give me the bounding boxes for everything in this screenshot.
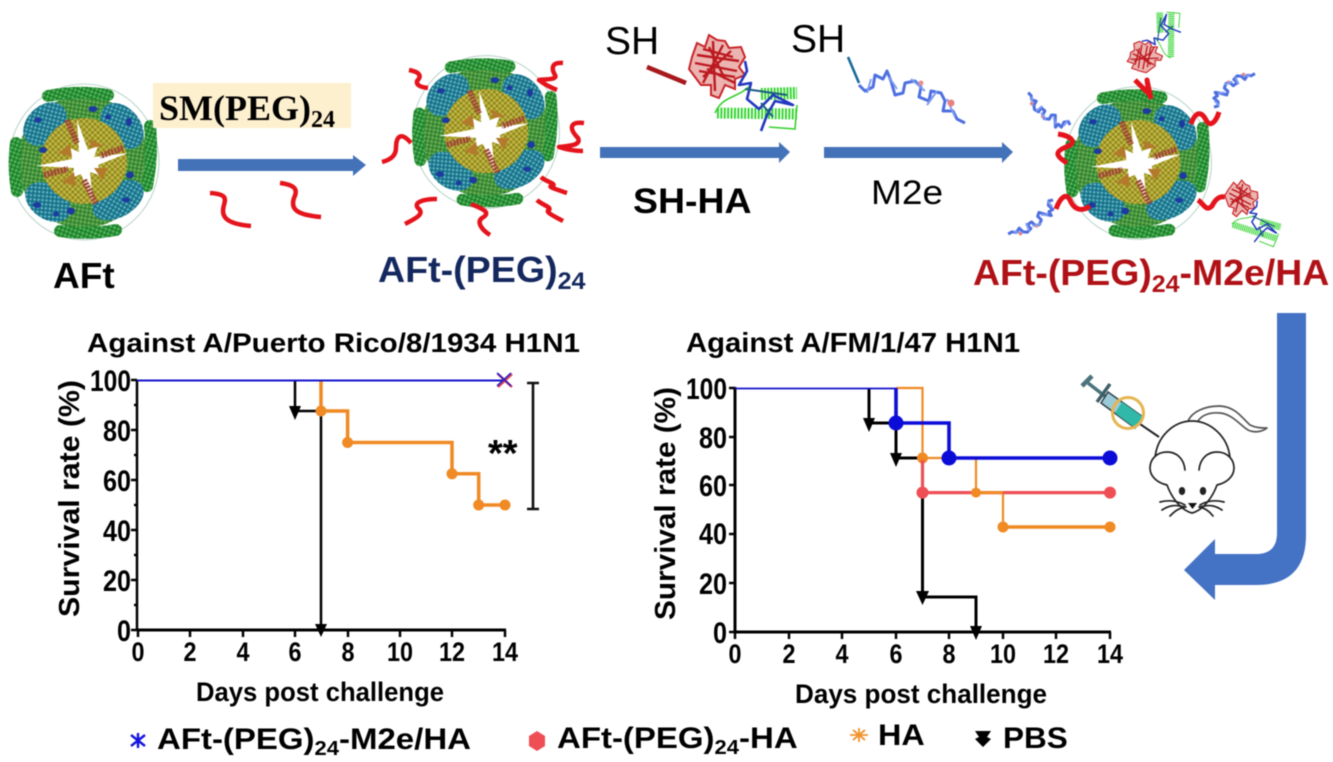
x axis: 12 xyxy=(1043,639,1069,669)
M2e linker xyxy=(848,57,859,83)
y axis: 40 xyxy=(103,515,131,548)
y axis: 20 xyxy=(103,565,131,598)
series: PBS xyxy=(863,388,982,640)
legend xyxy=(131,718,1068,760)
x axis: 12 xyxy=(439,637,465,667)
SH-HA linker xyxy=(647,67,686,83)
series: AFt-(PEG)24-M2e/HA xyxy=(735,388,1118,466)
label: SH on M2e: SH xyxy=(791,18,845,61)
y axis: 100 xyxy=(686,373,727,406)
icon: AFt-(PEG)24 nanocage xyxy=(412,56,560,208)
y axis: 80 xyxy=(103,415,131,448)
legend item: AFt-(PEG)24-HA: -HA xyxy=(739,720,798,755)
significance bracket xyxy=(527,383,539,509)
label: SH on HA: SH xyxy=(605,20,659,63)
x axis label: Days post challenge xyxy=(196,677,444,707)
y axis label: Survival rate (%) xyxy=(54,380,86,617)
icon: syringe xyxy=(1082,376,1159,437)
x axis: 2 xyxy=(782,639,796,669)
legend item: HA: HA xyxy=(878,718,925,752)
icon: mouse xyxy=(1150,406,1267,516)
y axis: 0 xyxy=(713,617,727,650)
chart: FM/1/47 challenge xyxy=(650,327,1123,709)
arrow: step 3 xyxy=(824,142,1013,163)
y axis: 20 xyxy=(699,568,727,601)
y axis: 0 xyxy=(117,615,131,648)
reagent box: SM(PEG)24 xyxy=(153,83,351,133)
label: AFt-(PEG)24: 24 xyxy=(558,268,586,295)
arrow: step 1 xyxy=(178,155,366,176)
x axis: 0 xyxy=(728,639,742,669)
x axis: 14 xyxy=(492,637,518,667)
legend item: AFt-(PEG)24-M2e/HA: AFt-(PEG) xyxy=(157,721,315,756)
y axis: 100 xyxy=(90,365,131,398)
legend item: AFt-(PEG)24-M2e/HA: -M2e/HA xyxy=(339,721,471,756)
chart title: Against A/FM/1/47 H1N1 xyxy=(686,327,1020,358)
x axis: 4 xyxy=(236,637,250,667)
y axis xyxy=(686,373,735,650)
free PEG linkers xyxy=(210,183,321,226)
legend item: AFt-(PEG)24-M2e/HA xyxy=(131,721,471,760)
label: SH-HA: SH-HA xyxy=(633,181,752,221)
icon: HA protein xyxy=(689,35,797,131)
label: AFt: AFt xyxy=(53,255,115,296)
x axis label: Days post challenge xyxy=(795,679,1047,709)
x axis: 10 xyxy=(387,637,413,667)
y axis: 60 xyxy=(699,470,727,503)
legend item: AFt-(PEG)24-HA: AFt-(PEG) xyxy=(557,720,715,755)
x axis: 6 xyxy=(288,637,302,667)
series: HA xyxy=(316,381,510,510)
reagent box: SM(PEG)24: 24 xyxy=(311,107,335,133)
legend item: HA xyxy=(850,718,925,752)
y axis: 80 xyxy=(699,422,727,455)
y axis: 60 xyxy=(103,465,131,498)
x axis xyxy=(132,630,518,667)
chart title: Against A/Puerto Rico/8/1934 H1N1 xyxy=(87,328,580,358)
legend item: AFt-(PEG)24-M2e/HA: 24 xyxy=(315,738,339,760)
x axis: 8 xyxy=(942,639,956,669)
arrow: step 2 xyxy=(600,142,790,163)
label: AFt-(PEG)24: AFt-(PEG) xyxy=(378,250,558,290)
x axis: 0 xyxy=(132,637,144,667)
PEG chains on AFt surface xyxy=(382,63,584,235)
y axis xyxy=(90,365,137,648)
x axis: 4 xyxy=(836,639,848,669)
legend item: AFt-(PEG)24-HA: 24 xyxy=(715,737,739,759)
series: HA xyxy=(896,388,1116,532)
legend item: PBS xyxy=(975,721,1068,755)
label: AFt-(PEG)24-M2e/HA: -M2e/HA xyxy=(1180,253,1329,293)
series: AFt-(PEG)24-HA xyxy=(916,460,1116,499)
y axis: 40 xyxy=(699,518,727,551)
series: AFt-(PEG)24-M2e/HA xyxy=(137,373,512,387)
series: PBS xyxy=(289,381,327,637)
x axis: 10 xyxy=(990,639,1016,669)
x axis: 8 xyxy=(342,637,354,667)
icon: AFt-(PEG)24-M2e/HA conjugate xyxy=(1008,12,1290,248)
icon: M2e peptide xyxy=(859,71,965,123)
legend item: AFt-(PEG)24-HA xyxy=(529,720,798,759)
y axis label: Survival rate (%) xyxy=(650,387,682,620)
legend item: PBS: PBS xyxy=(1003,721,1068,755)
arrow: immunisation to challenge xyxy=(1184,313,1306,600)
icon: AFt ferritin nanocage xyxy=(9,84,159,240)
x axis: 6 xyxy=(890,639,902,669)
x axis: 14 xyxy=(1097,639,1123,669)
reagent box: SM(PEG)24: SM(PEG) xyxy=(159,88,311,128)
label: M2e: M2e xyxy=(871,173,943,212)
chart: Puerto Rico challenge xyxy=(54,328,580,707)
label: AFt-(PEG)24-M2e/HA: 24 xyxy=(1152,271,1180,298)
x axis xyxy=(728,632,1123,669)
label: AFt-(PEG)24-M2e/HA: AFt-(PEG) xyxy=(973,253,1152,293)
x axis: 2 xyxy=(184,637,196,667)
significance stars: ** xyxy=(488,433,518,475)
